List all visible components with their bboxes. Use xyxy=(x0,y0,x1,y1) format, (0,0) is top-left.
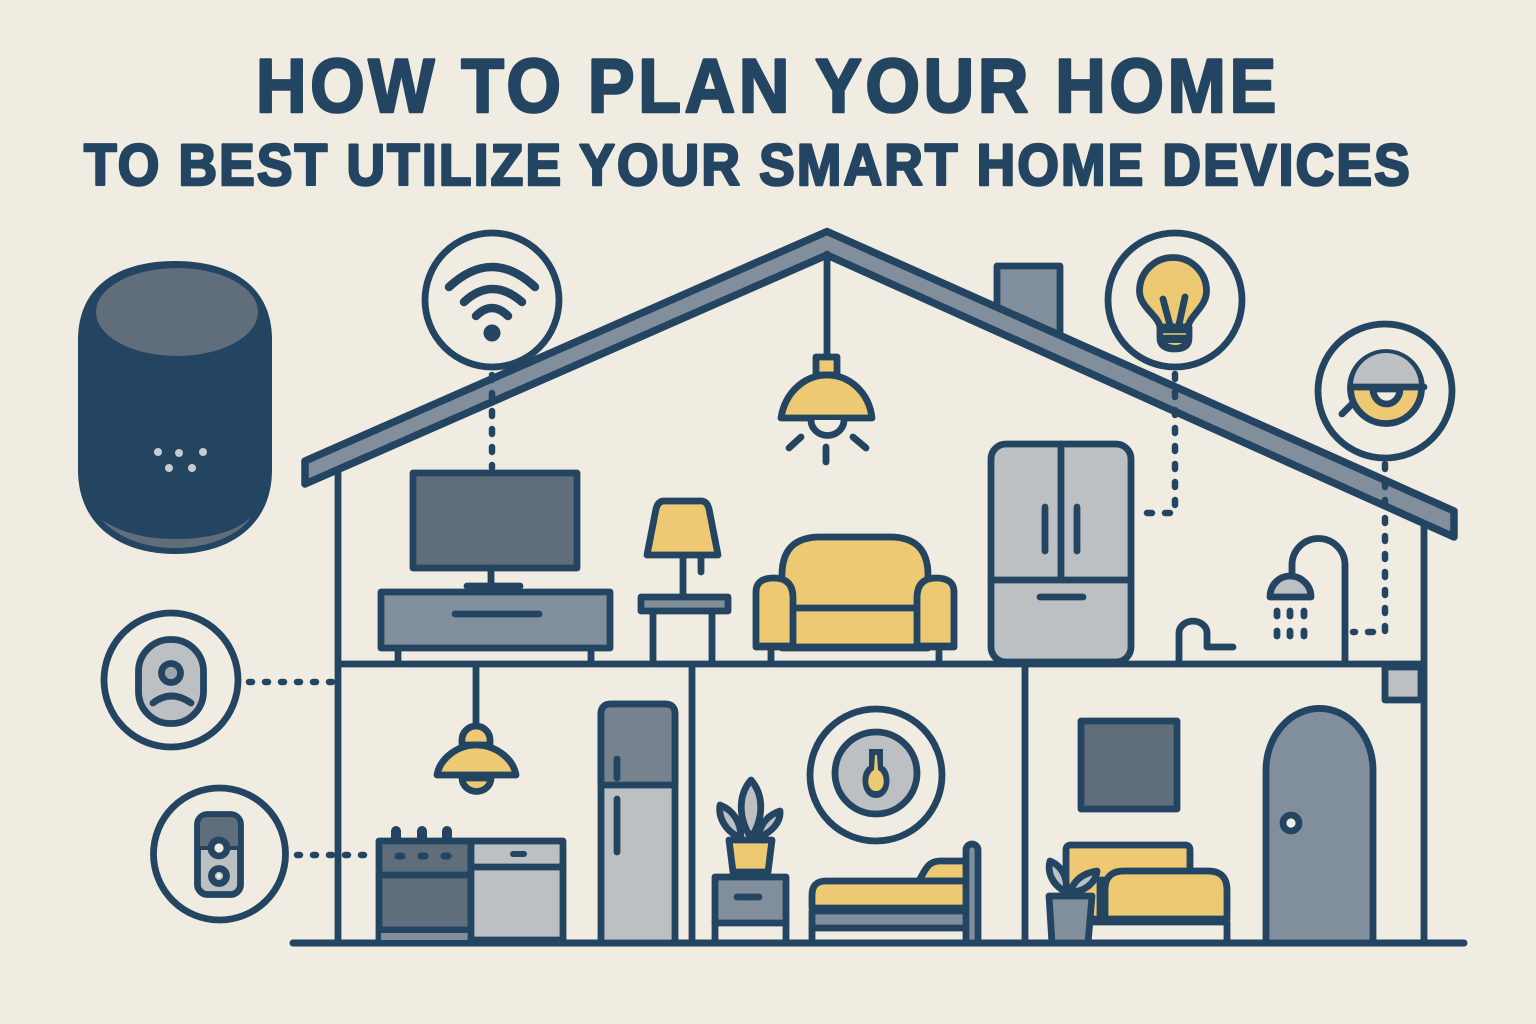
thermostat xyxy=(810,709,942,841)
side table with lamp xyxy=(641,501,728,663)
large french door fridge xyxy=(991,444,1131,662)
faucet xyxy=(1179,621,1233,664)
icon: video doorbell circle xyxy=(104,613,238,747)
television xyxy=(413,473,577,586)
connector: remote to range xyxy=(297,852,366,858)
icon: light bulb circle xyxy=(1108,233,1242,367)
house structure xyxy=(293,232,1464,943)
connector: doorbell to wall xyxy=(249,679,335,685)
connector: tv to wifi xyxy=(489,375,495,468)
walls and floors xyxy=(338,465,1424,943)
corner vent box xyxy=(1385,667,1421,700)
bed xyxy=(812,844,978,943)
living room xyxy=(381,254,1131,663)
title line 2: TO BEST UTILIZE YOUR SMART HOME DEVICES xyxy=(84,133,1410,197)
nightstand xyxy=(715,877,786,943)
kitchen xyxy=(379,665,675,943)
title xyxy=(84,44,1410,197)
bathroom fixtures xyxy=(1179,538,1345,664)
roof xyxy=(305,232,1454,537)
ceiling lamp xyxy=(781,254,872,462)
middle room xyxy=(715,709,978,943)
tv stand xyxy=(381,592,610,663)
potted plant on nightstand xyxy=(720,780,780,872)
connector: shower to camera xyxy=(1353,464,1385,632)
icon: wifi circle xyxy=(425,233,559,367)
kitchen pendant lamp xyxy=(437,665,516,791)
title line 1: HOW TO PLAN YOUR HOME xyxy=(256,44,1276,129)
yellow couch xyxy=(1066,845,1227,943)
icon: smart lock circle xyxy=(154,788,286,920)
potted plant xyxy=(1049,861,1097,943)
tall fridge xyxy=(601,704,675,943)
shower xyxy=(1270,538,1345,664)
range xyxy=(379,831,471,940)
ground line xyxy=(293,940,1464,946)
dishwasher xyxy=(471,841,563,940)
connector: fridge to bulb xyxy=(1142,374,1175,513)
door xyxy=(1266,708,1373,943)
icon: smart speaker xyxy=(78,261,272,554)
sofa xyxy=(756,537,954,663)
icon: security camera circle xyxy=(1318,324,1452,458)
wall picture xyxy=(1081,721,1177,809)
right room xyxy=(1049,708,1373,943)
chimney xyxy=(997,266,1060,335)
